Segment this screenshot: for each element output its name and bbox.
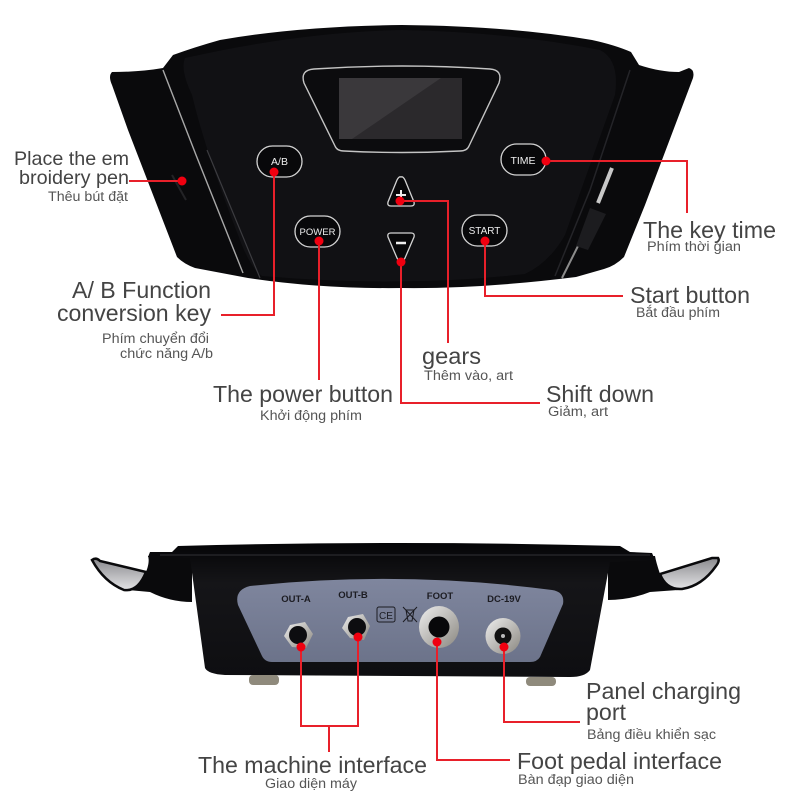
button: POWER — [295, 216, 340, 247]
button: POWER: POWER — [300, 227, 336, 238]
callout: embroidery pen: Place the em — [14, 148, 129, 170]
callout: machine interface: Giao diện máy — [265, 776, 357, 791]
callout: machine interface: The machine interface — [198, 752, 427, 778]
callout: A/B key: conversion key — [57, 300, 211, 326]
callout: start button: Bắt đầu phím — [636, 305, 720, 320]
callout: A/B key: A/ B Function — [72, 277, 211, 303]
callout: power button: Khởi động phím — [260, 408, 362, 423]
CE and recycling marks: CE — [379, 611, 393, 622]
port labels: OUT-A — [281, 594, 311, 605]
device: top control panel — [110, 25, 694, 288]
right pen cradle highlights — [598, 168, 612, 203]
port labels: OUT-B — [338, 590, 368, 601]
port: OUT-A — [284, 622, 313, 648]
button: TIME: TIME — [510, 155, 536, 167]
rear body — [148, 543, 655, 677]
button: A/B: A/B — [271, 156, 288, 168]
device: rear panel — [92, 543, 719, 686]
device body — [110, 25, 694, 288]
callout: time key: The key time — [643, 217, 776, 243]
left cradle wing — [92, 556, 192, 602]
callout: panel charging port — [500, 642, 741, 742]
callout: gears — [396, 196, 513, 383]
callout: A/B key — [57, 168, 278, 361]
port: OUT-B — [342, 614, 370, 640]
button: A/B — [257, 146, 302, 177]
display bezel — [303, 66, 500, 152]
connector panel — [237, 579, 563, 662]
callout: A/B key: chức năng A/b — [120, 346, 213, 361]
callout: power button — [213, 236, 393, 423]
button: START — [462, 215, 507, 246]
port: FOOT — [419, 606, 459, 648]
right cradle wing — [608, 556, 719, 600]
callout: panel charging port: Panel charging — [586, 678, 741, 704]
callout: panel charging port: port — [586, 699, 626, 725]
callout: shift down — [396, 258, 654, 419]
port labels — [281, 590, 522, 605]
callout: gears: gears — [422, 343, 481, 369]
button: plus — [388, 177, 414, 206]
button: TIME — [501, 144, 546, 175]
button: START: START — [469, 226, 500, 237]
callout: gears: Thêm vào, art — [424, 368, 513, 383]
callout: start button: Start button — [630, 282, 750, 308]
callout: panel charging port: Bảng điều khiển sạc — [587, 727, 716, 742]
center face — [184, 30, 616, 282]
button: minus — [388, 233, 414, 262]
callout: shift down: Giảm, art — [548, 404, 608, 419]
left pen cradle highlights — [163, 70, 243, 273]
callout: foot pedal interface — [432, 638, 722, 787]
callout: time key: Phím thời gian — [647, 239, 741, 254]
callout: embroidery pen: Thêu bút đặt — [48, 189, 128, 204]
port labels: FOOT — [427, 591, 453, 602]
callout: machine interface — [198, 632, 427, 791]
port labels: DC-19V — [487, 594, 522, 605]
callout: time key — [542, 156, 776, 254]
callout: shift down: Shift down — [546, 381, 654, 407]
callout: foot pedal interface: Bàn đạp giao diện — [518, 772, 634, 787]
callout: start button — [480, 236, 750, 320]
callout: embroidery pen: broidery pen — [19, 167, 129, 189]
callout: A/B key: Phím chuyển đổi — [102, 331, 209, 346]
callout: power button: The power button — [213, 381, 393, 407]
port: DC-19V — [486, 618, 520, 654]
callout: embroidery pen — [14, 148, 186, 204]
rubber feet — [249, 675, 279, 685]
CE and recycling marks — [377, 607, 417, 622]
callout: foot pedal interface: Foot pedal interface — [517, 748, 722, 774]
display screen — [339, 78, 462, 139]
